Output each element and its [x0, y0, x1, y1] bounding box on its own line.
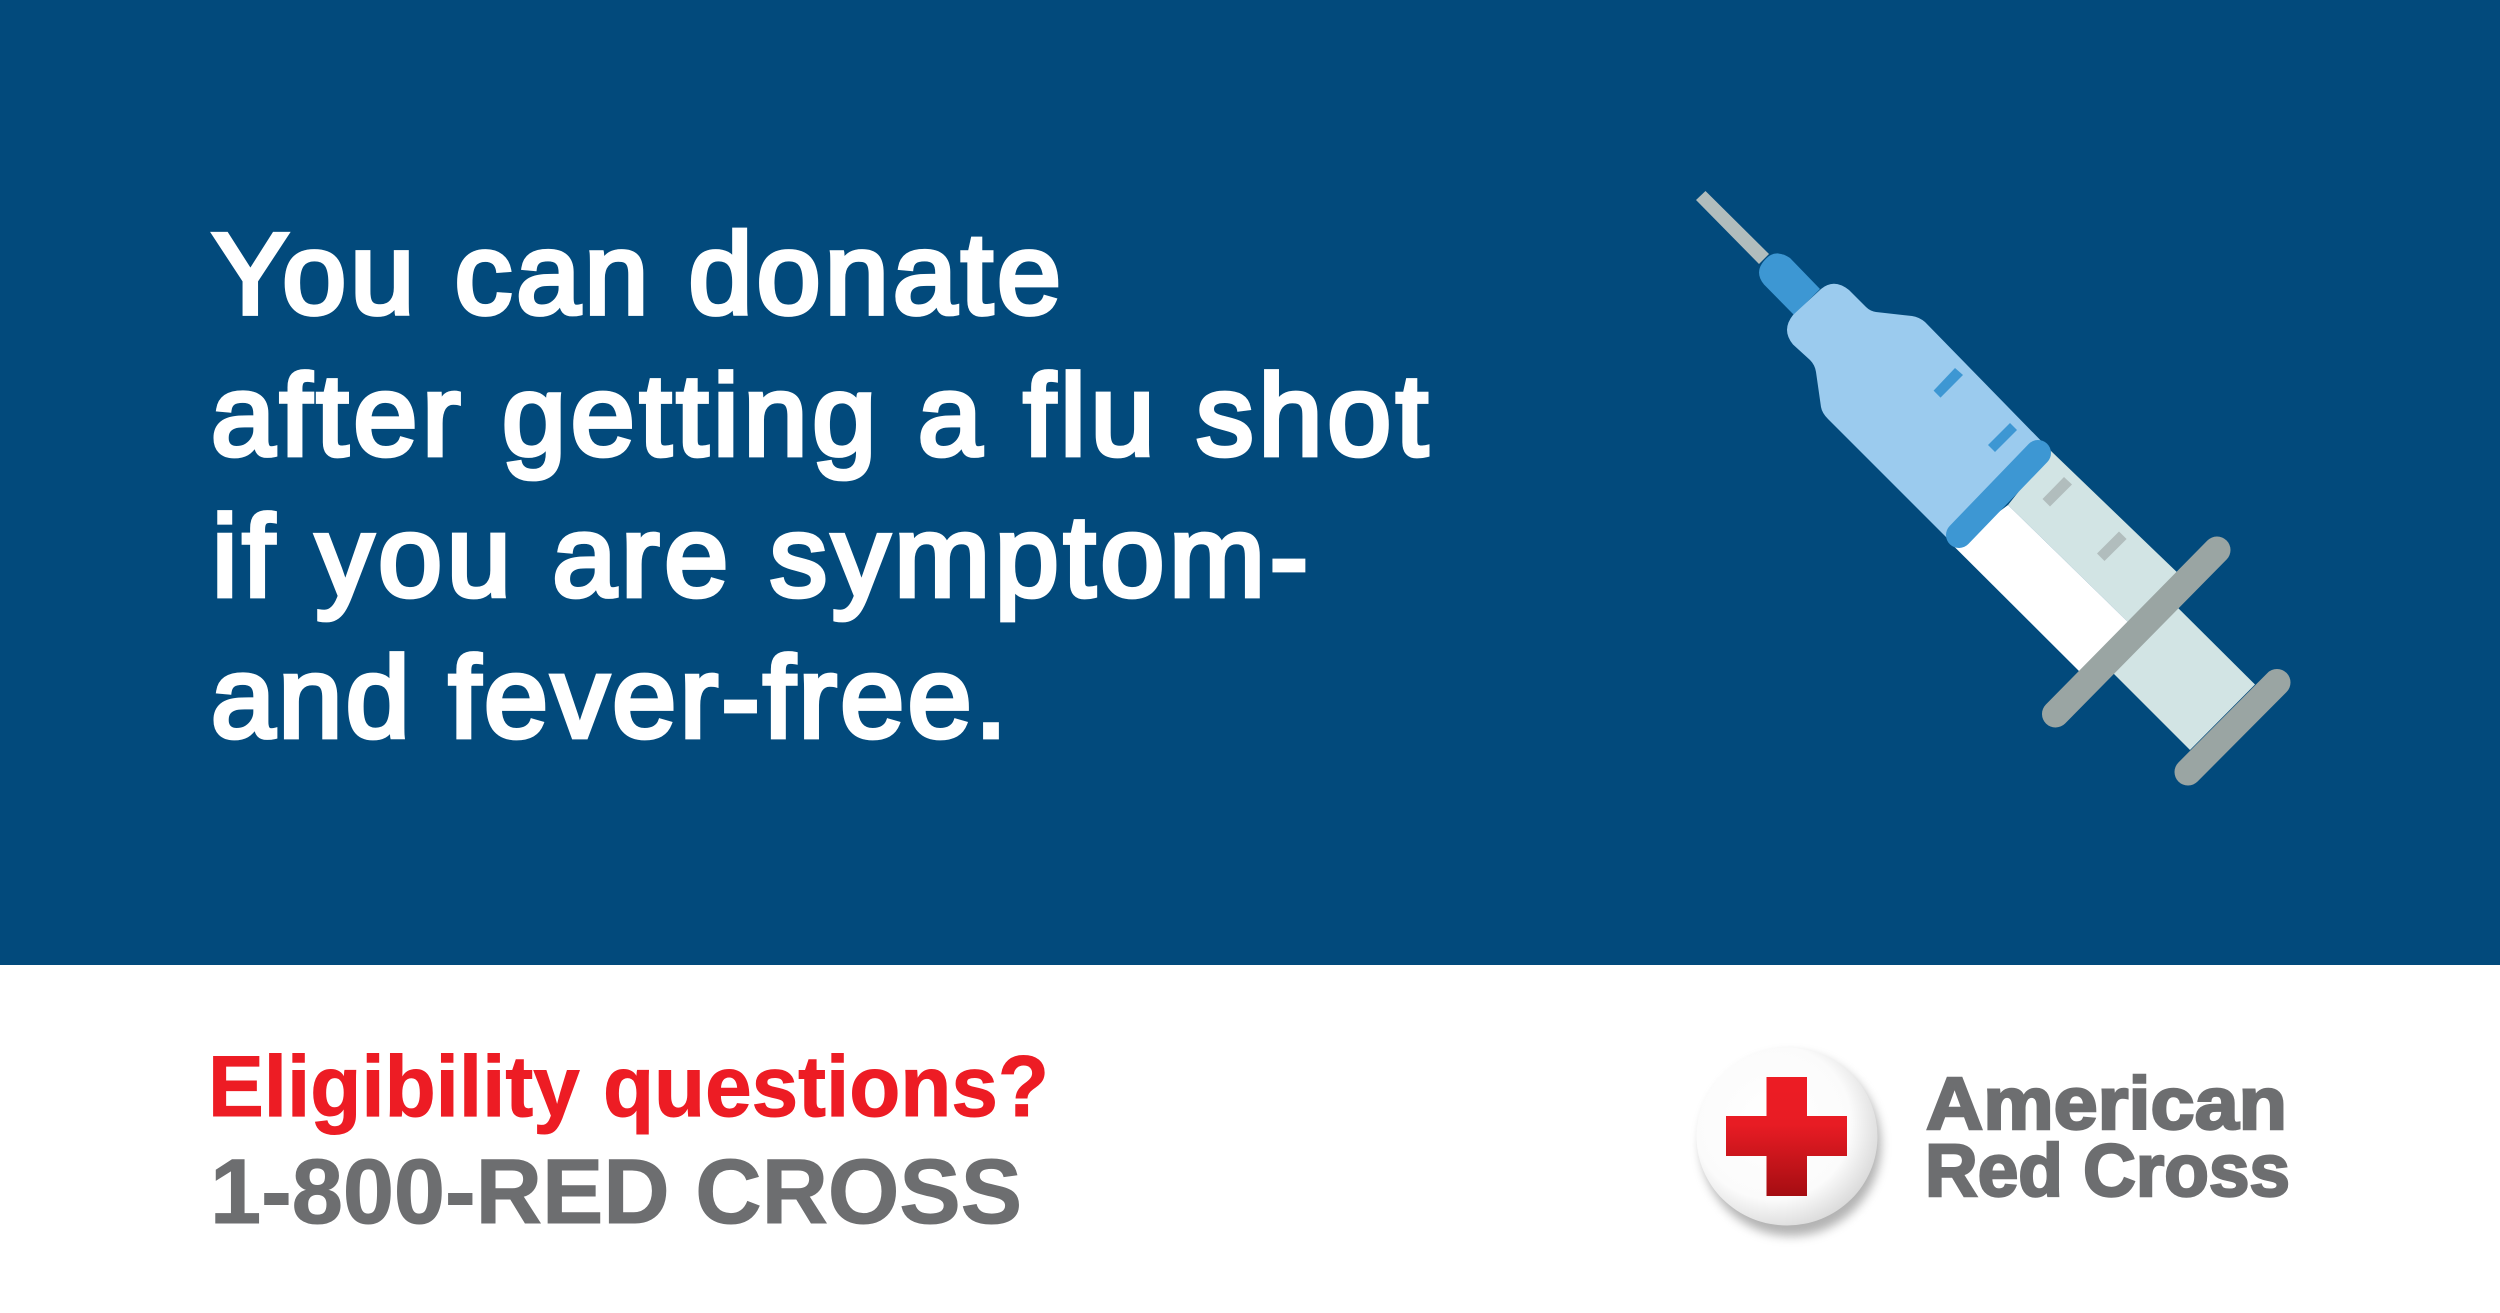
syringe plunger rod: [2095, 590, 2255, 750]
logo wordmark: American: [1926, 1062, 2287, 1145]
syringe white stripe: [1954, 505, 2132, 677]
syringe plunger end bar: [2188, 682, 2277, 772]
blue banner background: [0, 0, 2500, 965]
syringe hub: [1759, 253, 1820, 315]
logo button shadow: [1701, 1054, 1881, 1236]
logo button: [1696, 1048, 1878, 1226]
syringe flange bar: [2056, 550, 2217, 714]
heading: if you are symptom-: [212, 493, 1308, 621]
syringe stopper: [1959, 453, 2038, 535]
syringe liquid body: [1787, 284, 2051, 542]
heading: [211, 210, 1428, 762]
syringe blue ticks: [1934, 368, 2017, 452]
footer eligibility question: Eligibility questions?: [208, 1039, 1049, 1135]
footer phone number: 1-800-RED CROSS: [210, 1141, 1022, 1243]
American Red Cross logo: [1696, 1048, 2290, 1236]
heading: You can donate: [212, 210, 1061, 338]
logo wordmark: Red Cross: [1925, 1129, 2290, 1212]
logo wordmark: [1925, 1062, 2290, 1212]
logo red cross: [1726, 1077, 1847, 1196]
syringe barrel, empty part: [2008, 451, 2183, 627]
icon: syringe: [1696, 191, 2277, 772]
heading: and fever-free.: [211, 634, 1007, 762]
syringe gray ticks: [2042, 477, 2127, 561]
heading: after getting a flu shot: [211, 352, 1428, 480]
syringe needle: [1696, 191, 1769, 264]
